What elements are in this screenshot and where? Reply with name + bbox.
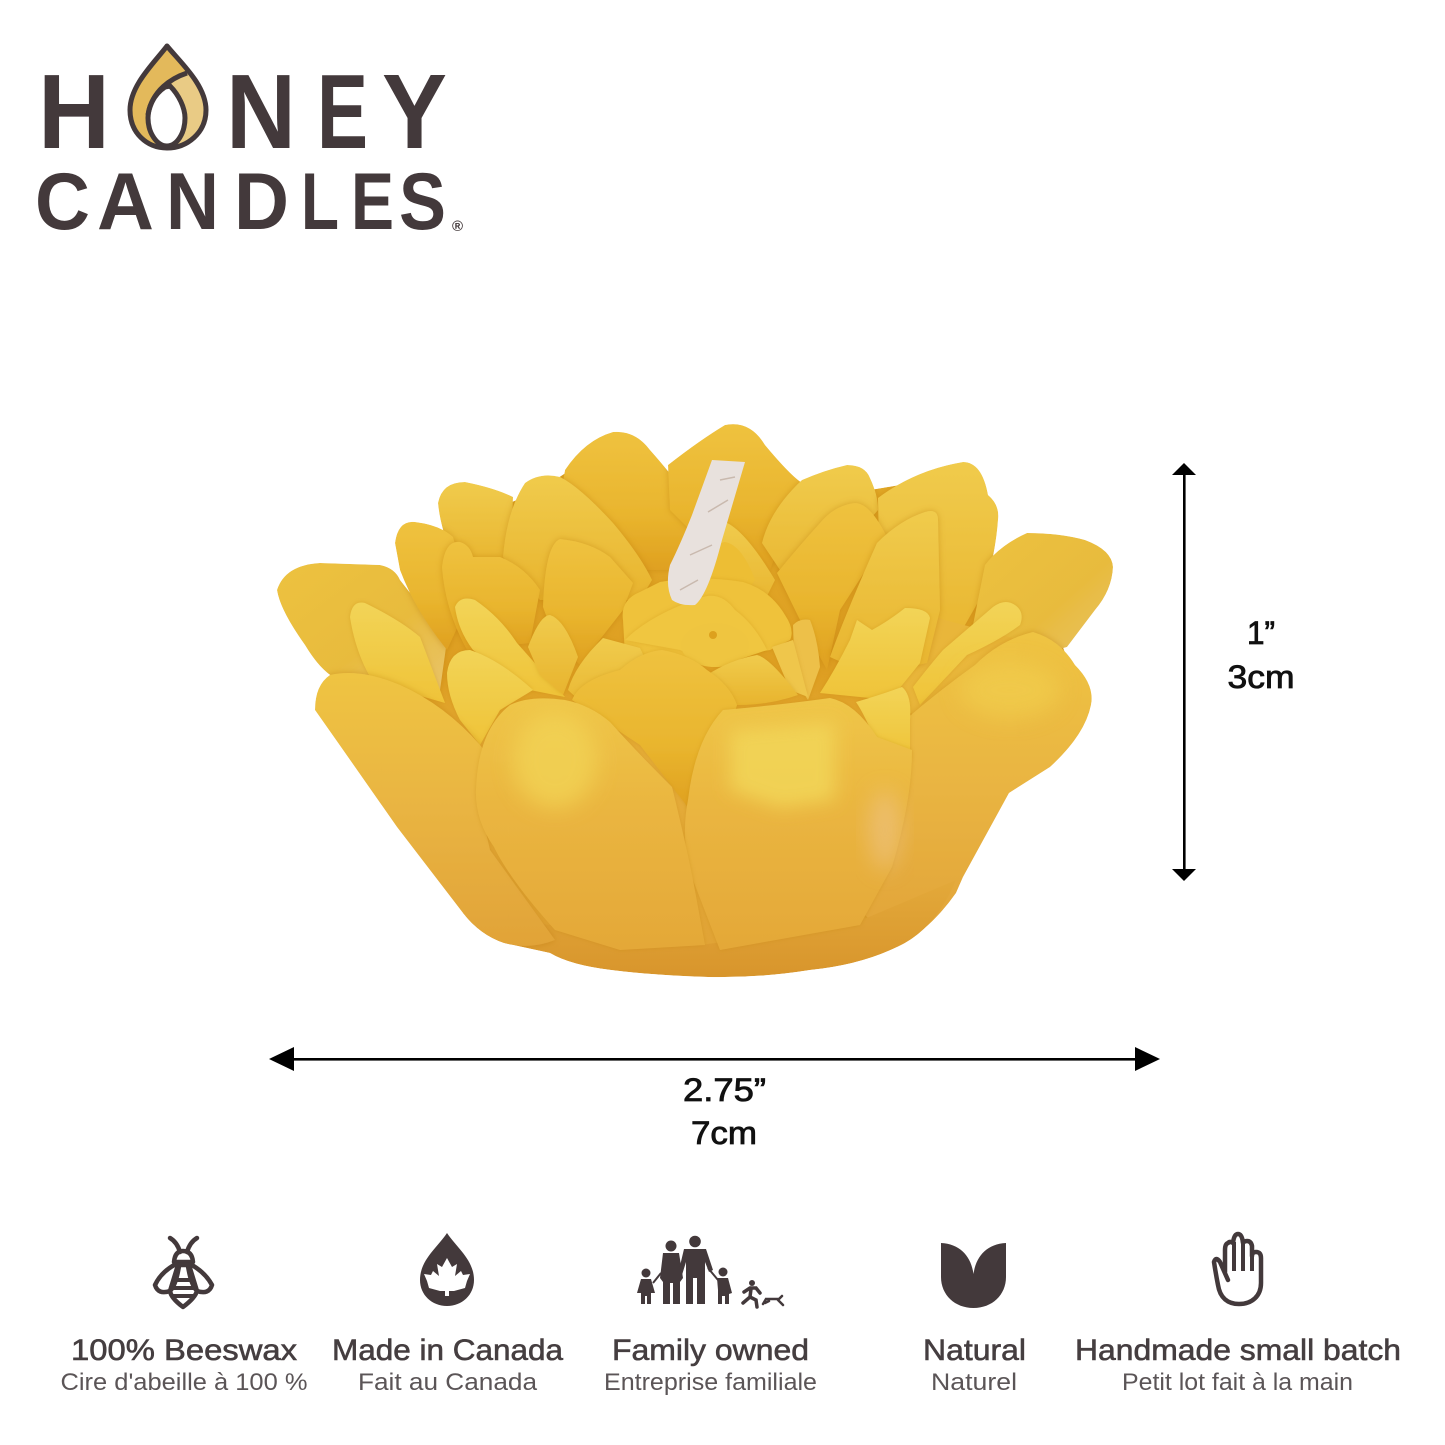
- label: width dimension: 7cm: [691, 1115, 757, 1151]
- arrow: width: [269, 1047, 1160, 1071]
- feature: Handmade small batch: [1075, 1234, 1401, 1396]
- logo word: HONEY: E: [317, 53, 368, 171]
- text: Handmade small batch: Handmade small batch: [1075, 1334, 1401, 1367]
- feature: 100% Beeswax: Cire d'abeille à 100 %: [60, 1369, 308, 1396]
- icon: drop with maple leaf: [420, 1233, 474, 1306]
- label: height dimension: 1”: [1247, 615, 1275, 651]
- logo word: CANDLES: D: [234, 157, 289, 247]
- label: height dimension: [1228, 615, 1294, 695]
- flower centre: [568, 522, 820, 810]
- front petals: [315, 632, 1092, 977]
- logo word: CANDLES: N: [166, 157, 219, 247]
- feature: Family owned: [604, 1236, 817, 1396]
- text: Made in Canada: Made in Canada: [332, 1334, 563, 1367]
- icon: family: [637, 1236, 783, 1307]
- logo: Honey Candles: [35, 46, 463, 247]
- logo word: CANDLES: [35, 157, 446, 247]
- feature: Natural: Naturel: [931, 1369, 1017, 1396]
- label: width dimension: [683, 1072, 766, 1151]
- back petals: [277, 424, 1113, 690]
- text: Natural: Natural: [923, 1334, 1026, 1367]
- text: 100% Beeswax: 100% Beeswax: [71, 1334, 297, 1367]
- logo word: HONEY: H: [38, 53, 110, 171]
- feature: Natural: [923, 1243, 1026, 1396]
- logo word: CANDLES: A: [97, 157, 154, 247]
- wick: [668, 460, 745, 605]
- logo word: HONEY: N: [226, 53, 296, 171]
- label: width dimension: 2.75”: [683, 1072, 766, 1108]
- logo word: CANDLES: E: [351, 157, 394, 247]
- feature: 100% Beeswax: [60, 1238, 308, 1396]
- registered mark: ®: [452, 218, 463, 235]
- logo word: CANDLES: C: [35, 157, 90, 247]
- feature: Made in Canada: [332, 1233, 563, 1396]
- text: Family owned: Family owned: [612, 1334, 809, 1367]
- label: height dimension: 3cm: [1228, 659, 1294, 695]
- logo word: CANDLES: S: [399, 157, 446, 247]
- candle: yellow beeswax flower: [277, 424, 1113, 977]
- feature: Handmade small batch: Petit lot fait à la main: [1122, 1369, 1353, 1396]
- icon: tulip leaf: [941, 1243, 1006, 1308]
- inner petals, left: [350, 539, 633, 745]
- feature: Made in Canada: Fait au Canada: [358, 1369, 538, 1396]
- inner petals, right: [777, 503, 1022, 720]
- arrow: height: [1172, 463, 1196, 881]
- icon: hand: [1214, 1234, 1261, 1304]
- logo icon: flame drop: [130, 46, 206, 148]
- wax highlights: [513, 662, 1060, 870]
- logo word: HONEY: [38, 53, 447, 171]
- logo word: CANDLES: L: [301, 157, 339, 247]
- logo word: HONEY: Y: [382, 53, 447, 171]
- feature: Family owned: Entreprise familiale: [604, 1369, 817, 1396]
- icon: bee: [155, 1238, 212, 1307]
